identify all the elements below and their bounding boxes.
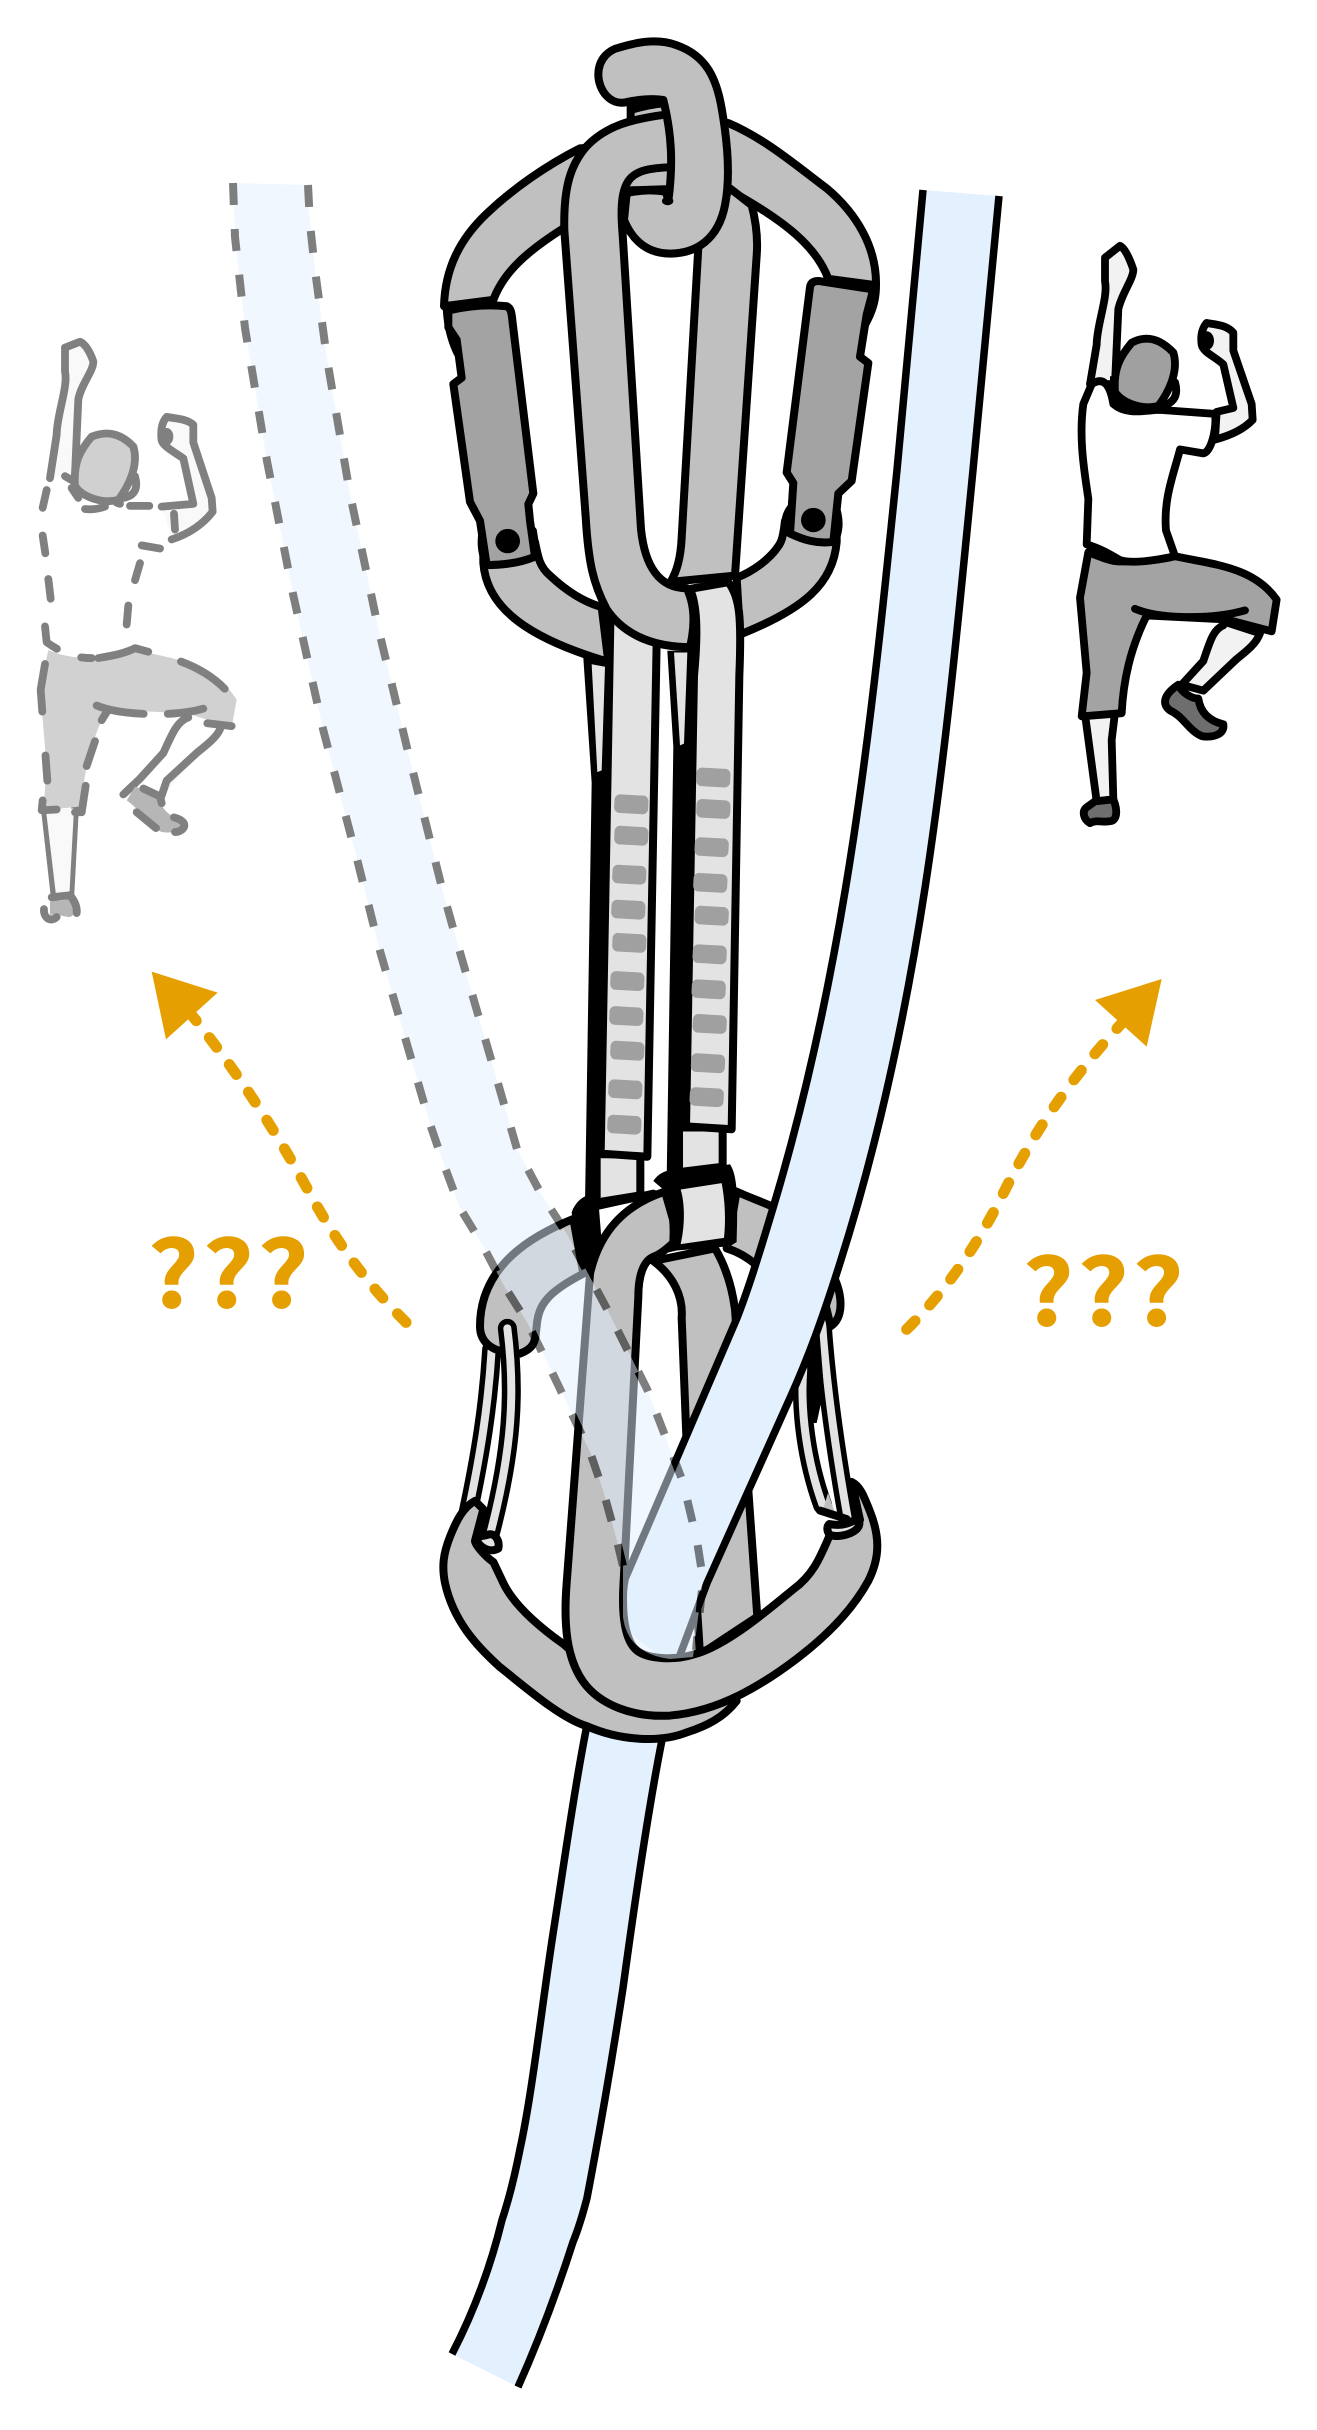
ghost climber: shorts outer dashed xyxy=(41,664,57,810)
faded rope: fill xyxy=(233,183,703,1659)
ghost climber: waist dashed line xyxy=(45,626,92,658)
question marks: left: ??? xyxy=(148,1202,308,1334)
climber: raised lower leg xyxy=(1182,621,1260,691)
wire gate: small wedge between wires xyxy=(823,1493,835,1513)
ghost climber: shorts hem right xyxy=(207,723,232,726)
bartacks: left xyxy=(607,794,649,1135)
ghost climber: ear xyxy=(123,476,136,498)
climber: lower leg, standing xyxy=(1085,712,1115,801)
climber: shorts crease xyxy=(1135,609,1245,617)
wire gate: black join between wires xyxy=(807,1330,824,1423)
upper carabiner: right arm xyxy=(713,121,876,285)
upper carabiner: front loop and hook xyxy=(564,41,728,647)
climber: fist xyxy=(1199,331,1214,350)
wire gate: right front cap xyxy=(827,1518,859,1536)
gate: left notches xyxy=(443,306,541,565)
back carabiner: leg xyxy=(653,1248,757,1655)
arrow: right dashed orange xyxy=(907,979,1162,1329)
wire gate: right front xyxy=(822,1322,848,1520)
climber: faded left position xyxy=(40,342,237,919)
upper carabiner: left arm xyxy=(444,146,607,306)
lower carabiner: front loop xyxy=(477,1175,877,1716)
wire gate: left front cap xyxy=(477,1534,499,1550)
climber: bent forearm xyxy=(1201,323,1253,440)
gate: right notches xyxy=(782,285,880,542)
wire gate: outer left xyxy=(468,1349,492,1511)
wire gate: front left xyxy=(488,1328,511,1541)
upper carabiner: hidden bar behind hook xyxy=(623,100,670,197)
climber: head xyxy=(1115,339,1175,407)
back carabiner: bottom arc xyxy=(443,1501,737,1739)
ghost climber: raised foot outline xyxy=(137,789,184,832)
upper carabiner: top hook xyxy=(598,41,728,254)
lower carabiner: right sling wrap xyxy=(663,1175,725,1250)
ghost climber: lower leg, standing xyxy=(45,808,75,901)
ghost climber: standing foot outline xyxy=(44,895,77,919)
ghost climber: neck lines xyxy=(65,476,149,509)
upper carabiner: hidden bar edges xyxy=(627,102,665,190)
ghost climber: raised foot xyxy=(127,787,183,833)
ghost climber: raised arm xyxy=(50,342,93,478)
ghost climber: shorts fill xyxy=(40,650,237,810)
sling: right tail xyxy=(679,1127,723,1172)
climber: right position xyxy=(1080,246,1277,823)
sling bottom: left black knot xyxy=(572,1195,602,1282)
climber: raised arm xyxy=(1090,246,1133,384)
rope: faded alternative position xyxy=(233,183,703,1659)
upper carabiner: hook tip xyxy=(662,197,673,205)
ghost climber: torso dashed right xyxy=(127,514,175,624)
climber: ear xyxy=(1163,382,1176,406)
sling: left rear strand highlight xyxy=(592,664,605,772)
climber: neck shadow xyxy=(1110,376,1133,412)
gate: right rivet xyxy=(801,508,826,532)
gate: right xyxy=(787,281,873,542)
rope: main strand running through carabiner xyxy=(620,190,999,1665)
back carabiner: right nose xyxy=(822,1276,841,1326)
upper carabiner: long front loop xyxy=(564,113,693,647)
lower carabiner assembly xyxy=(443,1164,848,1739)
sling bottom: left loop edge xyxy=(577,1194,653,1210)
ghost climber: waist dashed line right xyxy=(98,648,237,704)
arrow: left dashed orange xyxy=(152,972,406,1322)
sling: right dogbone strip xyxy=(686,582,740,1129)
ghost climber: standing foot xyxy=(50,899,75,917)
upper carabiner: lower right arc xyxy=(737,521,837,635)
bartacks: right xyxy=(689,767,731,1107)
upper carabiner: long back leg xyxy=(671,188,757,582)
ghost climber: inner thigh dashed xyxy=(75,709,108,812)
lower carabiner: J-shaped front body xyxy=(566,1192,877,1716)
wire gate: right rear xyxy=(802,1368,823,1505)
arrow: right dashes xyxy=(907,1023,1122,1329)
arrowhead: right xyxy=(1095,979,1162,1047)
ghost climber: fist xyxy=(160,428,173,445)
ghost climber: shorts crease and hem xyxy=(97,706,203,714)
gate: left rivet xyxy=(495,529,520,553)
question marks: right: ??? xyxy=(1023,1220,1183,1352)
rope: lower strand below quickdraw xyxy=(452,1700,666,2387)
gate: left xyxy=(448,305,535,565)
sling: left tail xyxy=(597,1154,640,1202)
sling: left rear strand xyxy=(583,658,613,1204)
climber: shorts xyxy=(1080,552,1277,716)
back carabiner: upper right arc xyxy=(727,1192,778,1265)
arrow: left dashes xyxy=(192,1015,406,1322)
ghost climber: lower leg fill xyxy=(46,808,74,895)
faded rope: right edge xyxy=(308,185,703,1650)
climber: standing foot xyxy=(1084,799,1116,823)
arrowhead: left xyxy=(152,972,218,1039)
sling bottom: right black band xyxy=(653,1164,737,1255)
lower carabiner: wedge of sling xyxy=(581,1215,602,1282)
climber: torso xyxy=(1082,381,1215,562)
sling: right rear strand highlight xyxy=(674,652,687,745)
ghost climber: head xyxy=(75,433,135,501)
back carabiner: upper left arc xyxy=(480,1219,583,1354)
sling: right rear strand xyxy=(667,651,693,1179)
ghost climber: bent forearm xyxy=(161,417,213,539)
ghost climber: raised lower leg xyxy=(123,717,220,800)
faded rope: left edge xyxy=(233,183,623,1566)
ghost climber: torso dashed left xyxy=(43,490,51,599)
wire gate: lower join xyxy=(820,1511,847,1519)
upper carabiner: lower left arc xyxy=(483,542,608,662)
sling: dogbone webbing with bartacks xyxy=(583,582,740,1204)
climber: raised foot xyxy=(1165,685,1223,737)
upper carabiner: rear parts xyxy=(443,100,880,662)
sling: left dogbone strip xyxy=(601,604,657,1157)
